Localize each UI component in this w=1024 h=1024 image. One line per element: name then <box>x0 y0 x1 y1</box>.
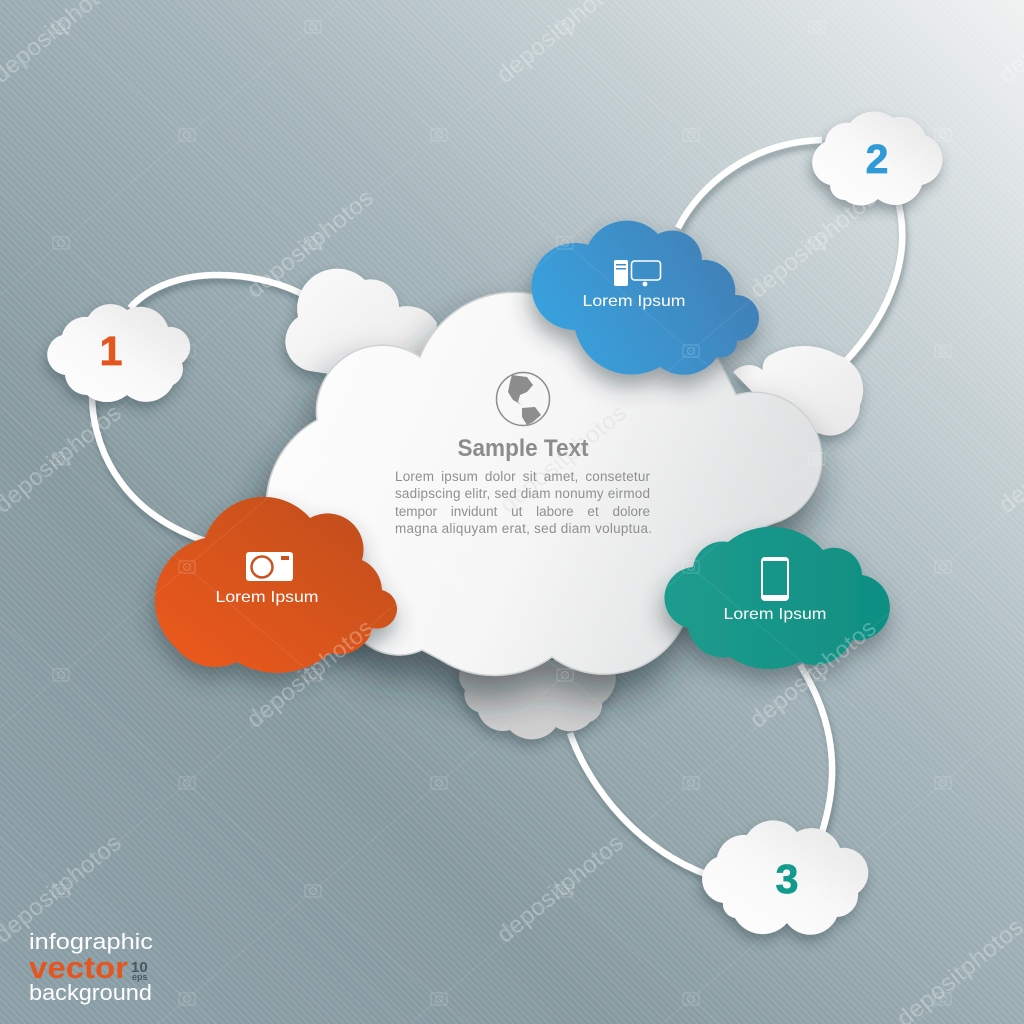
icon: computer <box>614 260 660 286</box>
cloud: teal: Lorem Ipsum <box>724 606 826 623</box>
watermarks: depositphotos <box>495 399 632 519</box>
icon: camera <box>246 552 293 581</box>
watermarks: depositphotos <box>492 829 629 949</box>
cloud: main white panel <box>266 292 822 675</box>
cloud 2 with number: 2 <box>866 136 888 182</box>
icon: globe <box>496 372 550 426</box>
ring 3 <box>570 665 832 875</box>
watermarks: depositphotos <box>242 184 379 304</box>
cloud 1 with number <box>47 304 190 402</box>
icon: smartphone <box>762 558 788 600</box>
body text <box>395 469 652 536</box>
logo text: infographic vector background: 10 <box>131 959 148 976</box>
watermarks: depositphotos <box>745 184 882 304</box>
cloud: blue: Lorem Ipsum <box>582 293 686 310</box>
cloud 1 with number: 1 <box>100 328 122 374</box>
logo text: infographic vector background: background <box>29 980 152 1005</box>
cloud: teal <box>664 527 890 669</box>
cloud: bottom background <box>459 660 616 739</box>
cloud 3 with number: 3 <box>776 856 798 902</box>
logo text: infographic vector background: eps <box>132 972 148 982</box>
logo text: infographic vector background <box>29 929 153 1005</box>
body text: sadipscing elitr, sed diam nonumy eirmod <box>395 486 650 501</box>
body text: magna aliquyam erat, sed diam voluptua. <box>395 521 652 536</box>
heading: Sample Text <box>458 435 589 462</box>
cloud: blue <box>531 221 759 375</box>
cloud: orange: Lorem Ipsum <box>216 589 318 606</box>
watermarks: depositphotos <box>242 614 379 734</box>
ring 2 <box>678 140 902 364</box>
ring 1 <box>92 275 308 541</box>
logo text: infographic vector background: vector <box>29 950 128 985</box>
cloud: right background <box>733 346 863 435</box>
logo text: infographic vector background: infographic <box>29 929 153 954</box>
watermarks: depositphotos <box>745 614 882 734</box>
cloud 2 with number <box>812 112 943 205</box>
cloud 3 with number <box>702 820 868 935</box>
body text: tempor invidunt ut labore et dolore <box>395 504 650 519</box>
body text: Lorem ipsum dolor sit amet, consetetur <box>395 469 650 484</box>
cloud: orange <box>155 497 397 673</box>
cloud: top-left background <box>285 269 437 400</box>
